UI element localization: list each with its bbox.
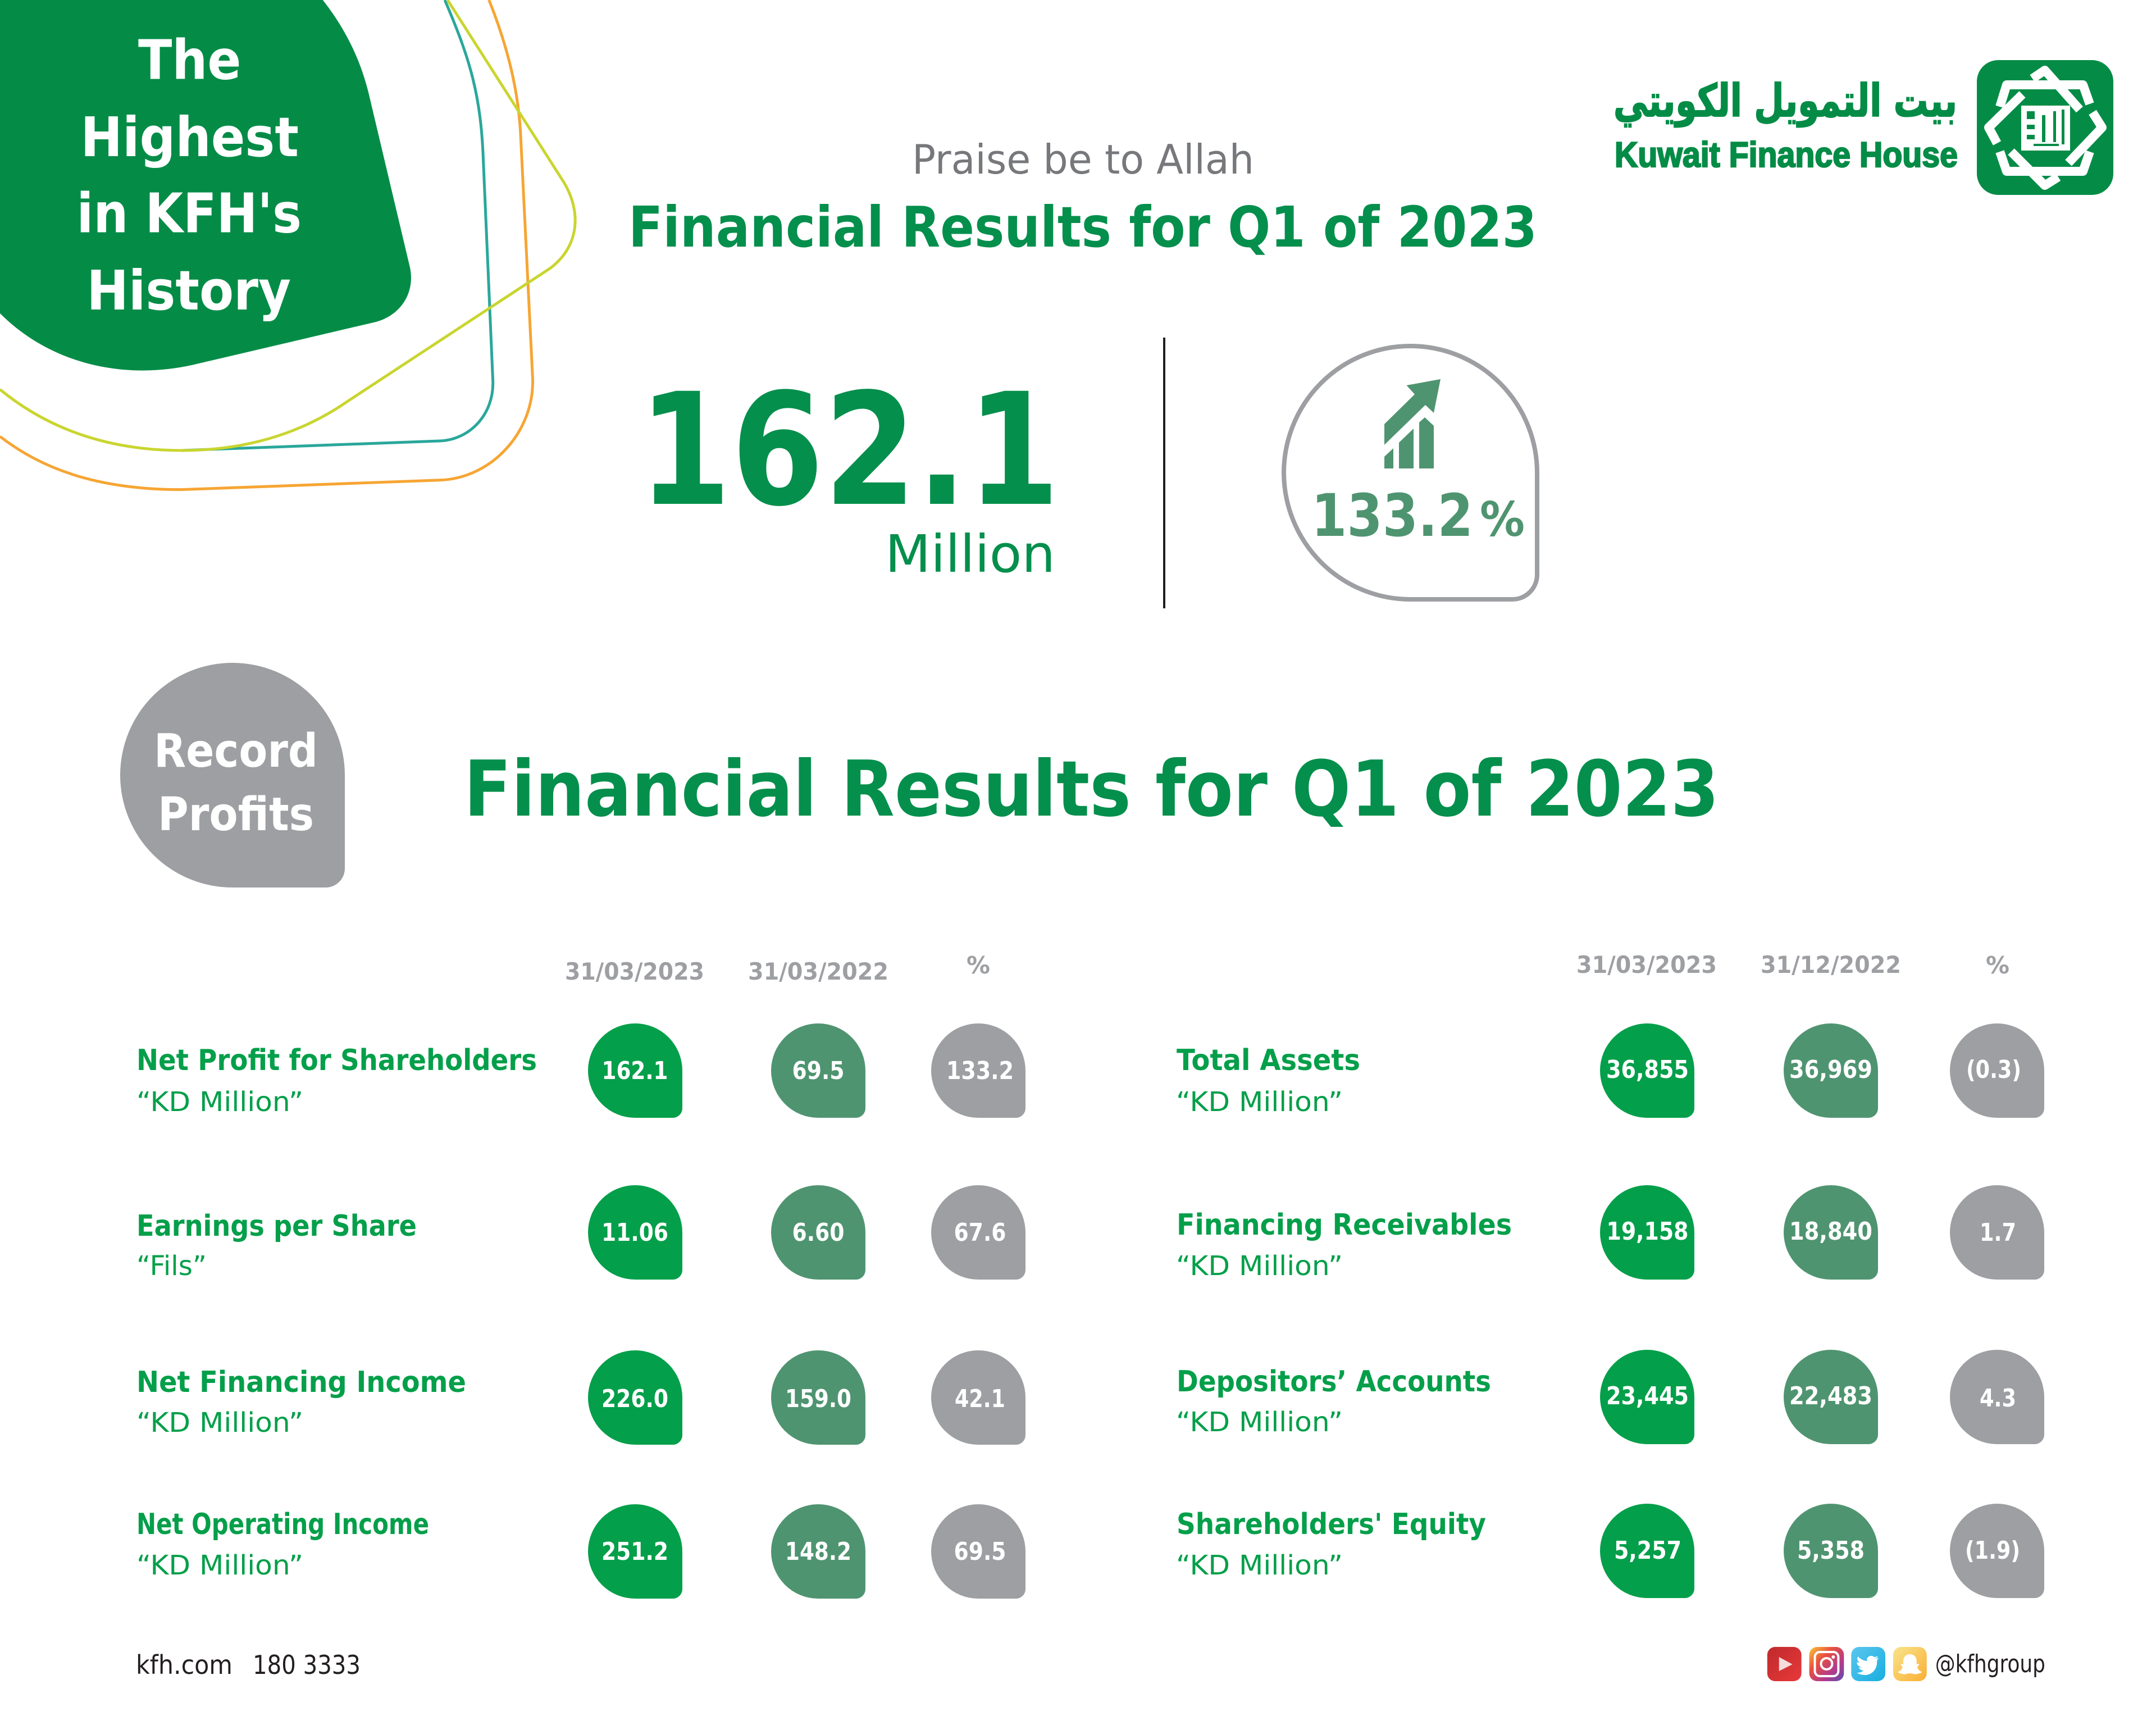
- row: depositors accounts: 22,483: [1789, 1382, 1872, 1410]
- row: total assets: Total Assets: [1177, 1044, 1360, 1077]
- panel: record profits tag: [120, 663, 345, 887]
- row: shareholders equity: 5,358: [1797, 1536, 1865, 1565]
- row: net profit: “KD Million”: [136, 1086, 303, 1118]
- row: depositors accounts: 4.3: [1980, 1384, 2016, 1413]
- unit: Million: [885, 524, 1055, 584]
- row: net financing income: 159.0: [785, 1385, 851, 1413]
- badge text: Highest: [80, 106, 299, 170]
- row: net profit: Net Profit for Shareholders: [136, 1044, 537, 1077]
- row: net financing income: [136, 1350, 1025, 1445]
- panel: net profit figure: [639, 361, 1060, 584]
- row: earnings per share: 11.06: [601, 1218, 668, 1247]
- panel: KFH logo: [1613, 60, 2113, 195]
- text: social handle: @kfhgroup: [1935, 1650, 2045, 1678]
- row: earnings per share: 6.60: [792, 1218, 845, 1247]
- row: net operating income: 148.2: [785, 1537, 851, 1566]
- panel: growth badge: [1284, 346, 1537, 599]
- panel: headline badge: [0, 0, 411, 371]
- divider line: [1163, 338, 1165, 608]
- column headers: 31/12/2022: [1761, 951, 1901, 978]
- row: net operating income: 251.2: [601, 1537, 668, 1566]
- row: net operating income: Net Operating Income: [136, 1508, 429, 1541]
- panel: header titles: [628, 136, 1537, 260]
- row: shareholders equity: “KD Million”: [1176, 1550, 1343, 1581]
- row: shareholders equity: [1176, 1504, 2044, 1598]
- heading: results title: Financial Results for Q1 of 2023: [628, 194, 1537, 260]
- big number: 162.1: [639, 361, 1060, 541]
- row: earnings per share: 67.6: [954, 1218, 1006, 1247]
- row: earnings per share: Earnings per Share: [136, 1209, 417, 1243]
- tag shape: [120, 663, 345, 887]
- badge text: in KFH's: [76, 181, 302, 245]
- column headers: 31/03/2022: [748, 958, 888, 985]
- column headers: %: [967, 952, 990, 979]
- decorative outline curves: [0, 0, 575, 490]
- row: total assets: 36,969: [1789, 1055, 1872, 1084]
- badge shape: [0, 0, 411, 371]
- row: earnings per share: “Fils”: [136, 1250, 207, 1282]
- row: net profit: 162.1: [602, 1057, 668, 1085]
- row: net profit: 133.2: [946, 1057, 1014, 1085]
- icon: rising arrow with bars: [1384, 379, 1441, 468]
- tag text line 2: Profits: [158, 788, 314, 841]
- panel: right table: [1176, 951, 2044, 1598]
- row: financing receivables: 1.7: [1980, 1218, 2016, 1247]
- icon: instagram: [1809, 1647, 1844, 1681]
- badge text: History: [86, 259, 291, 323]
- row: net financing income: 42.1: [955, 1385, 1005, 1413]
- badge outline: [1284, 346, 1537, 599]
- logo emblem: [1977, 60, 2113, 195]
- row: financing receivables: Financing Receivables: [1177, 1208, 1512, 1242]
- row: depositors accounts: Depositors’ Accounts: [1177, 1365, 1491, 1399]
- row: shareholders equity: Shareholders' Equity: [1177, 1508, 1486, 1541]
- row: net financing income: Net Financing Income: [136, 1366, 466, 1399]
- heading: main section title: Financial Results for Q1 of 2023: [464, 745, 1719, 834]
- row: shareholders equity: (1.9): [1965, 1536, 2020, 1565]
- row: net operating income: [136, 1504, 1025, 1599]
- column headers: %: [1986, 952, 2009, 979]
- logo text arabic: بيت التمويل الكويتي: [1613, 75, 1957, 128]
- row: total assets: “KD Million”: [1176, 1086, 1343, 1118]
- icon: snapchat: [1893, 1647, 1927, 1681]
- text: praise line: Praise be to Allah: [912, 136, 1254, 183]
- row: net operating income: 69.5: [954, 1537, 1006, 1566]
- panel: left table: [136, 952, 1025, 1599]
- percent sign: %: [1480, 492, 1525, 548]
- percentage value: 133.2: [1311, 481, 1473, 550]
- logo text english: Kuwait Finance House: [1615, 135, 1958, 175]
- row: net operating income: “KD Million”: [136, 1550, 303, 1581]
- row: depositors accounts: [1176, 1350, 2044, 1444]
- footer: website and phone: kfh.com: [136, 1650, 233, 1680]
- tag text line 1: Record: [154, 725, 318, 778]
- row: net financing income: “KD Million”: [136, 1407, 303, 1439]
- row: financing receivables: 19,158: [1606, 1217, 1688, 1246]
- row: net profit: [136, 1023, 1025, 1118]
- row: depositors accounts: 23,445: [1606, 1382, 1689, 1410]
- row: financing receivables: [1176, 1185, 2044, 1282]
- column headers: 31/03/2023: [1576, 951, 1717, 978]
- footer: social icons and handle: [1767, 1647, 2045, 1681]
- row: total assets: [1176, 1023, 2044, 1118]
- column headers: [565, 952, 990, 985]
- row: financing receivables: 18,840: [1789, 1217, 1872, 1246]
- row: earnings per share: [136, 1185, 1025, 1282]
- row: net financing income: 226.0: [601, 1385, 668, 1413]
- badge text: The: [138, 28, 241, 92]
- row: depositors accounts: “KD Million”: [1176, 1407, 1343, 1438]
- footer: website and phone: 180 3333: [253, 1650, 361, 1680]
- footer: website and phone: [136, 1650, 361, 1680]
- badge text: [76, 28, 302, 323]
- row: financing receivables: “KD Million”: [1176, 1250, 1343, 1282]
- column headers: [1576, 951, 2009, 979]
- row: total assets: 36,855: [1606, 1055, 1689, 1084]
- icon: video: [1767, 1647, 1802, 1681]
- row: total assets: (0.3): [1966, 1055, 2021, 1084]
- row: net profit: 69.5: [792, 1057, 845, 1085]
- column headers: 31/03/2023: [565, 958, 704, 985]
- row: shareholders equity: 5,257: [1614, 1536, 1681, 1565]
- icon: twitter: [1851, 1647, 1885, 1681]
